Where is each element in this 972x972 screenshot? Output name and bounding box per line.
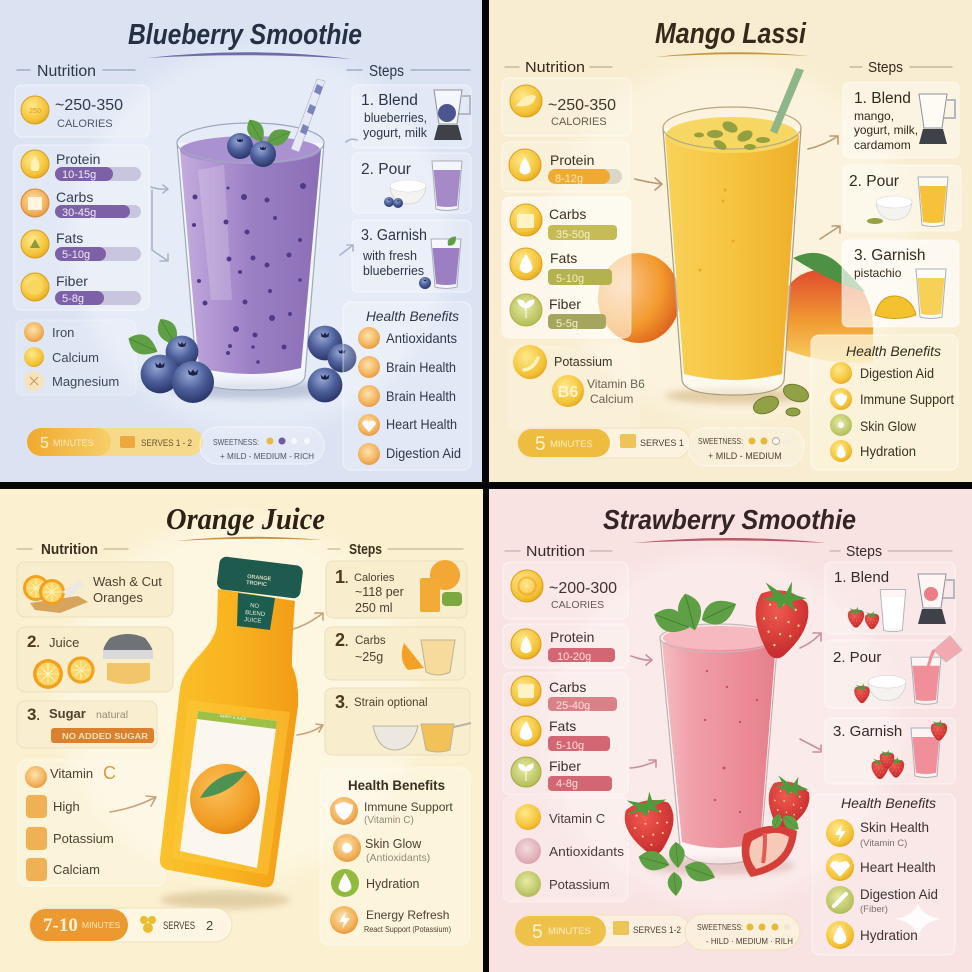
card: vitamins: High	[53, 799, 80, 814]
fiber row: 5-8g	[62, 293, 84, 305]
step 3: strain: 3.	[335, 692, 348, 712]
panel: health benefits: Heart Health	[386, 416, 457, 432]
fats row	[510, 248, 612, 285]
time and serves pill	[27, 428, 203, 456]
time and serves pill: SERVES 1	[640, 438, 684, 448]
arrows	[110, 613, 323, 812]
step 2: carbs	[325, 627, 465, 680]
protein row	[21, 150, 141, 181]
step: wash and cut	[17, 562, 173, 617]
heading: Nutrition	[505, 59, 612, 76]
fats row: Fats	[550, 250, 577, 266]
time and serves pill: 5	[535, 434, 546, 455]
step: juice: 2.	[27, 632, 40, 651]
step 3: garnish: 3. Garnish	[833, 723, 902, 740]
panel: orange juice	[0, 489, 483, 972]
card: calories: 250	[29, 108, 41, 115]
heading: Steps: Steps	[369, 63, 404, 80]
carbs row: Carbs	[549, 679, 586, 695]
sweetness scale: + MILD - MEDIUM - RICH	[220, 452, 314, 461]
title: Orange Juice: Orange Juice	[166, 501, 325, 536]
sweetness scale: SWEETNESS:	[697, 922, 743, 932]
sweetness scale: SWEETNESS:	[213, 437, 259, 447]
panel: strawberry smoothie	[489, 489, 972, 972]
carbs row: 30-45g	[62, 207, 96, 219]
card: protein: 10-20g	[557, 651, 591, 663]
card: minerals: Potassium	[554, 355, 612, 369]
card: calories: CALORIES	[551, 116, 607, 128]
arrows	[630, 633, 821, 768]
fats row: 5-10g	[556, 273, 584, 285]
panel: health benefits: Hydration	[366, 877, 420, 891]
card: minerals	[16, 320, 136, 395]
step 1: blend: cardamom	[854, 138, 911, 152]
sweetness scale	[200, 427, 324, 464]
step 1: blend: mango,	[854, 109, 894, 123]
step 3: garnish	[825, 718, 955, 784]
panel: health benefits: Hydration	[860, 443, 916, 459]
title: Mango Lassi: Mango Lassi	[655, 18, 807, 50]
heading: Nutrition: Nutrition	[37, 63, 96, 80]
carbs row: 35-50g	[556, 229, 590, 241]
sweetness scale: + MILD - MEDIUM	[708, 451, 782, 461]
fats row: 5-10g	[556, 740, 584, 752]
time and serves pill: MINUTES	[550, 439, 593, 450]
carbs row: Carbs	[56, 189, 93, 205]
heading: Steps	[347, 63, 470, 80]
step 3: garnish	[352, 220, 471, 292]
illustration: orange juice bottle: BERRY & JUICE	[220, 714, 247, 721]
card: minerals: Vitamin C	[549, 811, 605, 826]
panel: health benefits: Health Benefits	[841, 795, 936, 811]
card: protein	[502, 142, 629, 192]
illustration: blueberry glass	[124, 79, 356, 403]
card: minerals: Potassium	[549, 877, 610, 892]
card: calories: CALORIES	[57, 118, 113, 130]
card: macronutrients	[503, 673, 628, 795]
step 2: pour	[843, 165, 961, 231]
illustration: orange juice bottle	[160, 556, 304, 909]
card: minerals: Iron	[52, 325, 74, 340]
title underline	[175, 537, 322, 541]
arrows	[635, 136, 840, 239]
step 3: strain: Strain optional	[354, 697, 428, 709]
card: calories: CALORIES	[551, 599, 604, 611]
time and serves pill: MINUTES	[548, 926, 591, 937]
card: calories	[15, 85, 149, 137]
panel: health benefits: Heart Health	[860, 860, 936, 875]
step 1: calories: 250 ml	[355, 601, 393, 615]
step 1: blend: yogurt, milk,	[854, 123, 918, 137]
time and serves pill: SERVES 1 - 2	[141, 438, 192, 448]
card: minerals: Calcium	[590, 392, 633, 406]
step 3: garnish	[842, 240, 959, 327]
heading: Steps	[328, 542, 463, 558]
fats row: 5-10g	[62, 249, 90, 261]
sweetness scale	[685, 914, 800, 950]
heading: Nutrition: Nutrition	[526, 544, 585, 560]
protein row: Protein	[56, 151, 100, 167]
illustration: strawberry glass	[621, 575, 814, 897]
step 3: strain	[325, 688, 471, 755]
carbs row	[510, 204, 617, 241]
step 1: blend: 1. Blend	[361, 92, 418, 109]
panel: health benefits: (Vitamin C)	[364, 815, 414, 826]
step 2: pour	[352, 153, 471, 213]
panel: health benefits: (Vitamin C)	[860, 838, 907, 849]
step 3: garnish: 3. Garnish	[361, 227, 427, 244]
panel: health benefits: React Support (Potassium)	[364, 925, 451, 934]
fiber row: Fiber	[56, 273, 88, 289]
carbs row	[511, 676, 617, 712]
step: wash and cut: Wash & Cut	[93, 574, 162, 589]
fiber row: Fiber	[549, 758, 581, 774]
heading: Nutrition: Nutrition	[41, 542, 98, 558]
time and serves pill: 7-10	[43, 915, 78, 936]
fats row: Fats	[549, 718, 576, 734]
card: minerals	[508, 345, 645, 430]
step 3: garnish: pistachio	[854, 266, 902, 280]
panel: health benefits: Immune Support	[860, 391, 954, 407]
card: vitamins	[18, 760, 165, 886]
sweetness scale: SWEETNESS:	[698, 436, 743, 446]
card: minerals: Vitamin B6	[587, 377, 645, 391]
card: minerals: B6	[558, 384, 578, 401]
card: macronutrients	[14, 145, 149, 310]
step 2: pour: 2. Pour	[361, 161, 411, 178]
illustration: orange juice bottle: ORANGE	[247, 574, 272, 583]
step 1: calories: Calories	[354, 572, 395, 584]
fiber row	[511, 757, 612, 791]
step 1: blend: 1. Blend	[834, 569, 889, 586]
illustration: mango lassi glass	[663, 68, 811, 417]
time and serves pill: SERVES	[163, 920, 195, 932]
card: calories: ~250-350	[548, 97, 616, 114]
title underline	[655, 52, 810, 57]
panel: health benefits: Skin Glow	[860, 418, 917, 434]
arrows to steps	[340, 139, 357, 255]
panel: health benefits	[320, 768, 470, 945]
card: calories: ~250-350	[55, 97, 123, 114]
heading: Steps: Steps	[868, 59, 903, 76]
panel: health benefits	[343, 302, 471, 470]
card: vitamins: Vitamin	[50, 766, 93, 781]
step 2: pour: 2. Pour	[849, 173, 899, 190]
heading: Nutrition: Nutrition	[525, 59, 585, 76]
step 3: garnish: blueberries	[363, 263, 424, 278]
time and serves pill: 2	[206, 918, 213, 933]
step: juice: Juice	[49, 635, 79, 650]
step 2: pour: 2. Pour	[833, 649, 881, 666]
carbs row: Carbs	[549, 206, 586, 222]
step 1: blend: blueberries,	[364, 111, 427, 125]
card: vitamins: C	[103, 763, 116, 783]
arrows to glass	[151, 185, 168, 261]
step 2: carbs: ~25g	[355, 650, 383, 664]
heading: Nutrition	[505, 544, 612, 560]
sparkle mark	[895, 903, 941, 936]
heading: Steps	[830, 544, 952, 560]
step 1: blend: 1. Blend	[854, 90, 911, 107]
time and serves pill	[518, 428, 690, 458]
step: sugar: Sugar	[49, 706, 86, 721]
title: Strawberry Smoothie: Strawberry Smoothie	[603, 504, 856, 535]
step 1: calories	[326, 560, 467, 618]
heading: Steps: Steps	[349, 542, 382, 558]
fats row	[21, 230, 141, 261]
title underline	[147, 52, 352, 59]
carbs row: 25-40g	[556, 700, 590, 712]
card: calories: ~200-300	[549, 580, 617, 597]
fats row	[511, 716, 610, 752]
panel: health benefits	[811, 335, 958, 470]
step 2: carbs: Carbs	[355, 635, 386, 647]
panel: mango lassi	[489, 0, 972, 482]
illustration: mangoes	[598, 253, 873, 363]
card: macronutrients	[502, 197, 631, 338]
panel: health benefits	[812, 794, 955, 955]
card: calories	[503, 562, 628, 619]
step: sugar	[17, 701, 157, 748]
card: vitamins: Potassium	[53, 831, 114, 846]
card: protein	[503, 624, 628, 668]
time and serves pill: SERVES 1-2	[633, 925, 681, 935]
panel: health benefits: Digestion Aid	[860, 887, 938, 902]
protein row: 10-15g	[62, 169, 96, 181]
panel: health benefits: Brain Health	[386, 388, 456, 404]
card: protein: Protein	[550, 152, 594, 168]
panel: health benefits: Immune Support	[364, 800, 453, 814]
illustration: orange juice bottle: JUICE	[244, 617, 262, 625]
fiber row	[21, 273, 141, 305]
card: calories	[502, 78, 631, 136]
step 1: blend	[843, 82, 959, 158]
panel: health benefits: Energy Refresh	[366, 908, 449, 922]
card: minerals: Magnesium	[52, 374, 119, 389]
panel: health benefits: (Fiber)	[860, 904, 888, 915]
sweetness scale: - HILD · MEDIUM · RILH	[706, 936, 793, 946]
panel: health benefits: Skin Health	[860, 820, 929, 835]
step 1: blend	[352, 85, 471, 148]
step: juice	[17, 627, 173, 692]
title: Blueberry Smoothie: Blueberry Smoothie	[128, 19, 362, 51]
time and serves pill	[30, 908, 232, 942]
fiber row: 5-5g	[556, 318, 578, 330]
step 2: pour	[825, 636, 962, 708]
heading: Nutrition	[17, 63, 135, 80]
heading: Steps: Steps	[846, 544, 882, 560]
time and serves pill	[515, 915, 690, 947]
sweetness scale	[688, 428, 804, 466]
panel: health benefits: Antioxidants	[386, 330, 457, 346]
step 2: carbs: 2.	[335, 630, 348, 650]
heading: Steps	[850, 59, 952, 76]
step: sugar: natural	[96, 709, 128, 721]
step 3: garnish: 3. Garnish	[854, 247, 926, 264]
card: protein: Protein	[550, 629, 594, 645]
card: vitamins: Calciam	[53, 862, 100, 877]
step 1: calories: 1.	[335, 567, 348, 587]
panel: health benefits: Skin Glow	[365, 837, 422, 851]
card: protein: 8-12g	[555, 173, 583, 185]
step 1: blend	[825, 562, 955, 634]
panel: health benefits: (Antioxidants)	[366, 852, 430, 864]
step: sugar: NO ADDED SUGAR	[62, 731, 148, 741]
time and serves pill: 5	[532, 922, 543, 943]
fiber row: 4-8g	[556, 778, 578, 790]
illustration: orange juice bottle: TROPIC	[246, 580, 267, 588]
panel: health benefits: Health Benefits	[366, 308, 459, 324]
illustration: orange juice bottle: BLEND	[245, 610, 266, 618]
fiber row	[510, 294, 606, 330]
card: minerals: Antioxidants	[549, 844, 625, 859]
heading: Nutrition	[17, 542, 128, 558]
panel: health benefits: Digestion Aid	[860, 365, 934, 381]
step 3: garnish: with fresh	[362, 248, 417, 263]
step: sugar: 3.	[27, 705, 40, 724]
time and serves pill: 5	[40, 435, 49, 452]
carbs row	[21, 189, 141, 219]
panel: health benefits: Health Benefits	[846, 343, 941, 359]
step 1: calories: ~118 per	[355, 585, 404, 599]
time and serves pill: MINUTES	[53, 438, 94, 448]
panel: health benefits: Health Benefits	[348, 777, 445, 793]
card: minerals: Calcium	[52, 350, 99, 365]
card: minerals	[503, 797, 628, 902]
time and serves pill: MINUTES	[82, 920, 121, 930]
panel: health benefits: Digestion Aid	[386, 445, 461, 461]
panel: health benefits: Hydration	[860, 928, 918, 943]
fiber row: Fiber	[549, 296, 581, 312]
panel: health benefits: Brain Health	[386, 359, 456, 375]
fats row: Fats	[56, 230, 83, 246]
step: wash and cut: Oranges	[93, 590, 143, 605]
illustration: orange juice bottle: NO	[250, 603, 260, 610]
panel: blueberry smoothie	[0, 0, 482, 482]
title underline	[633, 538, 826, 543]
step 1: blend: yogurt, milk	[363, 126, 428, 140]
